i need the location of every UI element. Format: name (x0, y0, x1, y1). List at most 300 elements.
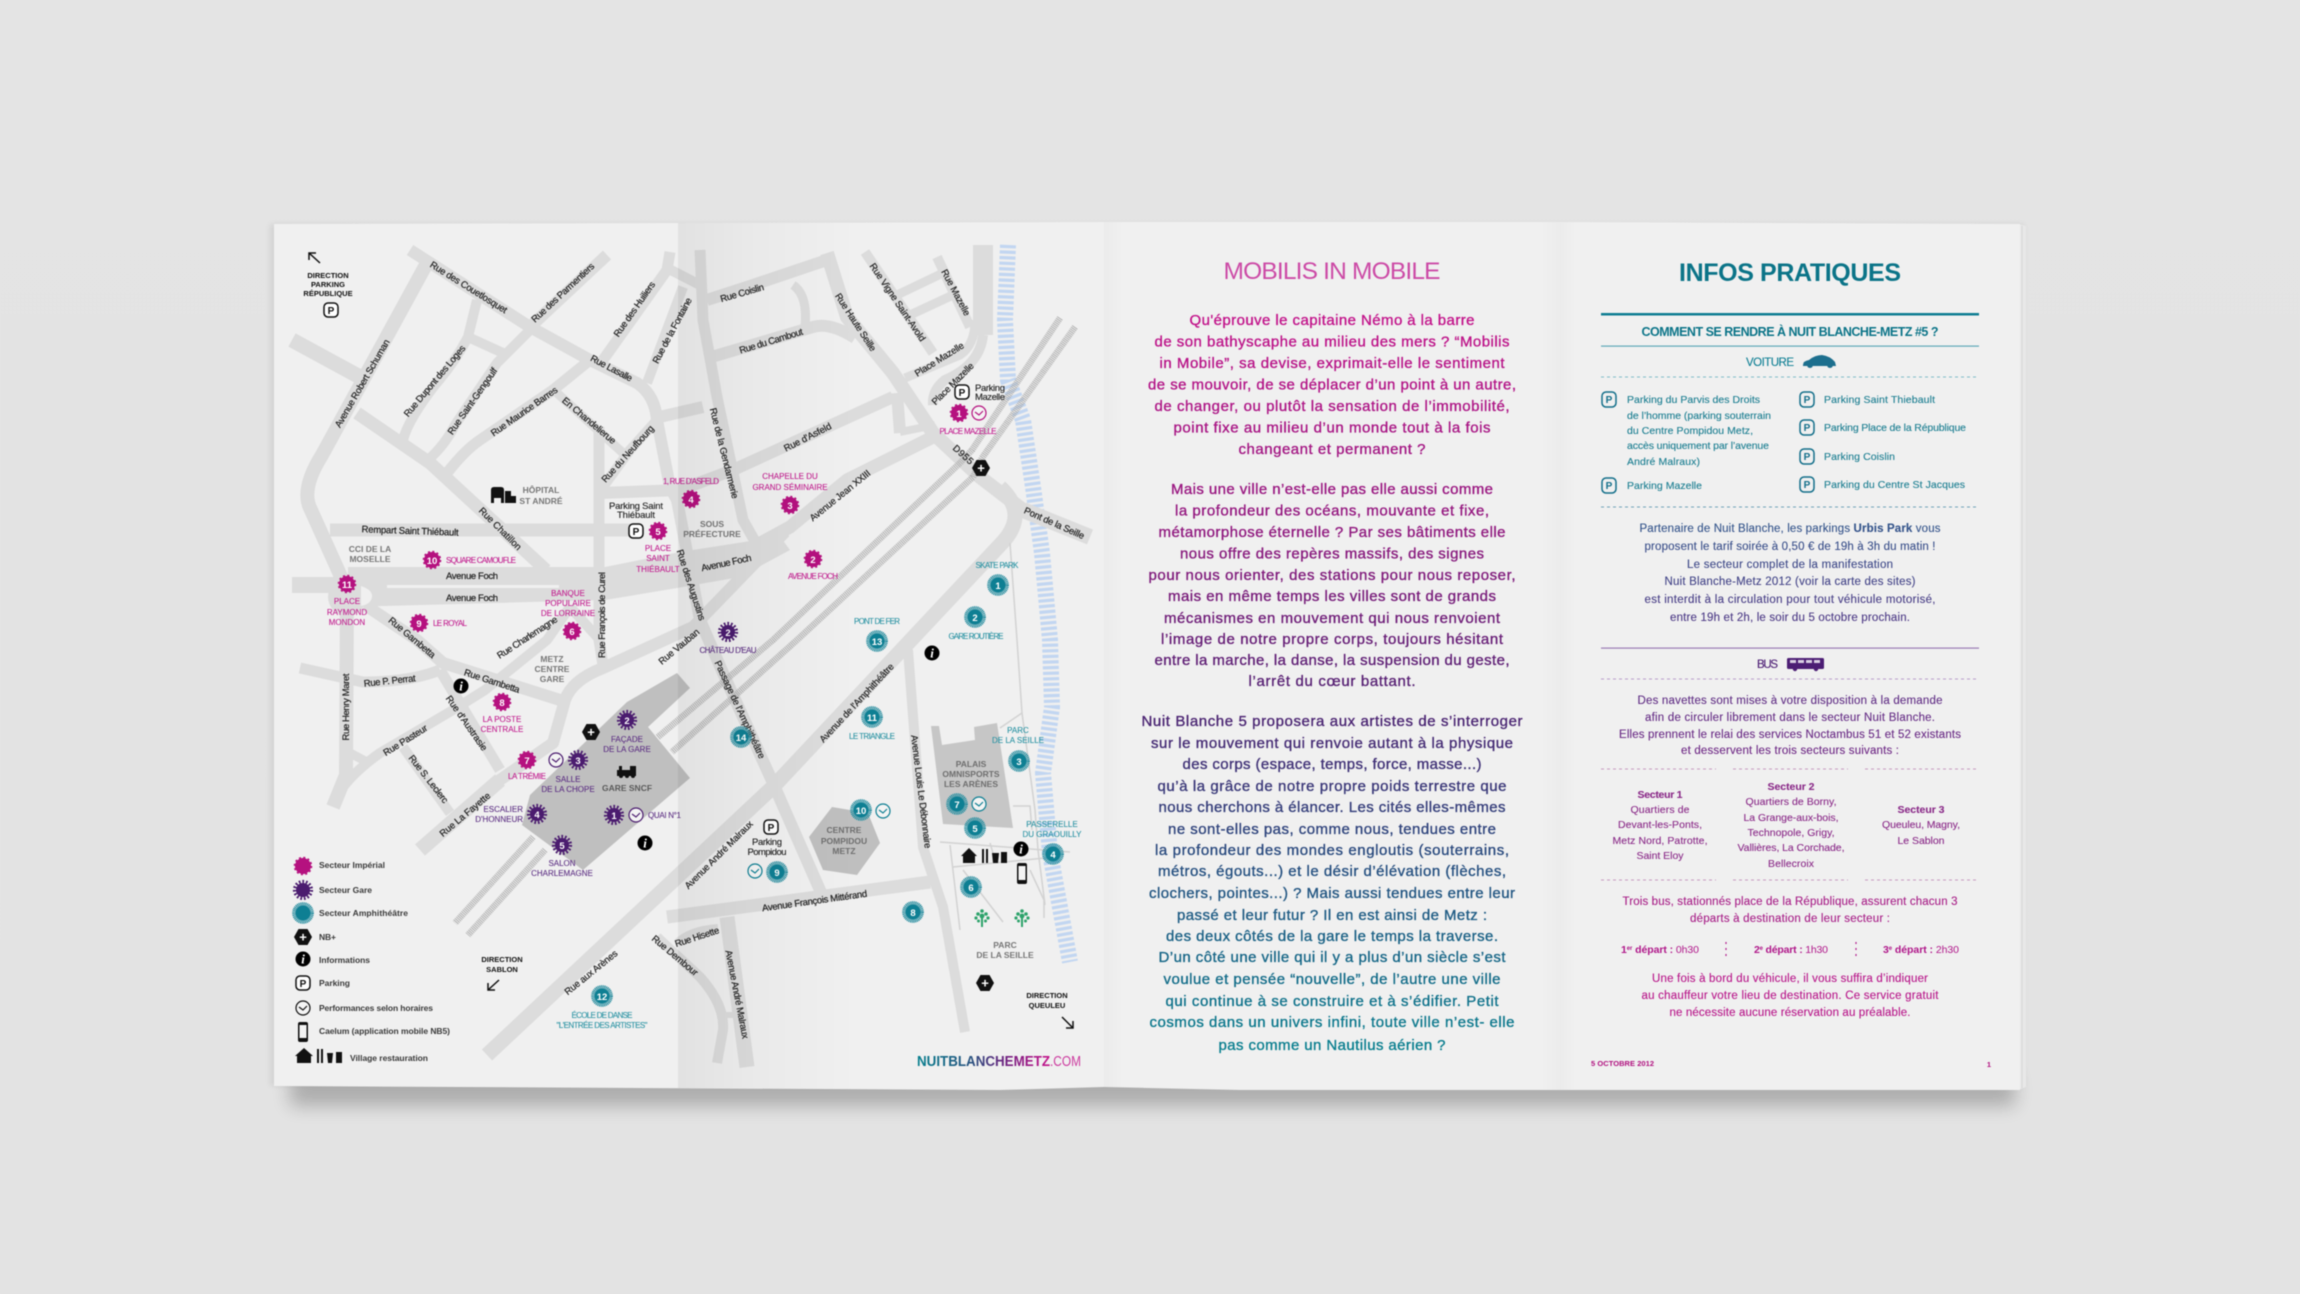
text: une fois à bord: ne nécessite aucune réservation au préalable. (1670, 1007, 1910, 1019)
street names: Rue Vauban (657, 627, 702, 667)
parking icon letters: P (1606, 395, 1613, 406)
sectors (1612, 781, 1960, 870)
departure times: 1 (1621, 944, 1627, 956)
body text: qui continue à se construire et à s’édifier. Petit (1166, 993, 1499, 1010)
direction labels (303, 271, 1068, 1010)
venue labels: secteur amphithéâtre: DE LA SEILLE (992, 736, 1044, 745)
body text: pas comme un Nautilus aérien ? (1218, 1037, 1446, 1054)
street names: Rue La Fayette (438, 791, 493, 840)
text: navettes (1619, 695, 1961, 757)
legend icons (292, 858, 342, 1063)
street names: Rue Maurice Barres (489, 385, 560, 439)
departure times: e (1760, 946, 1764, 952)
street names: Rue Gambetta (386, 615, 438, 661)
street names: Avenue François Mittérand (761, 889, 868, 914)
icons: parking: P (959, 388, 966, 399)
street names: Avenue Jean XXIII (808, 468, 873, 524)
parking icon letters: P (1606, 481, 1613, 492)
text: une fois à bord (1642, 973, 1939, 1019)
legend labels: Performances selon horaires (319, 1003, 433, 1013)
venue labels: secteur impérial: MONDON (329, 618, 365, 627)
street names: Rue de la Fontaine (651, 296, 695, 366)
label plate: Parking Saint Thiébault (605, 499, 667, 520)
page number: 1 (1987, 1060, 1991, 1069)
website address: .COM (1050, 1054, 1081, 1070)
body text: Mais une ville n’est-elle pas elle aussi comme (1171, 481, 1493, 498)
marker: secteur amphithéâtre numbered points: 4 (1050, 850, 1056, 861)
panel: map spread (274, 222, 1104, 1090)
icons: parking: P (328, 306, 335, 317)
departure times: 3 (1883, 944, 1889, 956)
body text: passé et leur futur ? Il en est ainsi de Metz : (1177, 907, 1487, 924)
street names: Rue Hisette (674, 925, 721, 950)
venue labels: secteur impérial: BANQUE (551, 589, 585, 598)
street names: Rue d'Austrasie (443, 694, 489, 753)
text: navettes: afin de circuler librement dans le secteur Nuit Blanche. (1645, 712, 1935, 724)
direction labels: DIRECTION (481, 955, 523, 964)
place names in grey: METZ (832, 846, 856, 856)
departure times: départ : (1763, 944, 1803, 956)
street names: Rue Lasalle (588, 353, 634, 384)
parking names: de l’homme (parking souterrain (1627, 410, 1771, 422)
marker: secteur amphithéâtre numbered points: 1 (995, 581, 1001, 592)
venue labels: secteur gare: FAÇADE (611, 735, 643, 744)
page paper (1104, 222, 1560, 1090)
icon: car (1803, 355, 1836, 368)
text: Urbis Park: est interdit à la circulation pour tout véhicule motorisé, (1644, 594, 1936, 606)
street names: Pont de la Seille (1022, 505, 1086, 542)
body text: changeant et permanent ? (1238, 441, 1426, 458)
place names in grey: DE LA SEILLE (976, 950, 1034, 960)
icon: phone Caelum (1017, 863, 1027, 884)
street names: Rue du Cambout (738, 327, 805, 357)
marker: secteur impérial numbered points: 3 (787, 501, 793, 512)
venue labels: secteur impérial: SAINT (646, 554, 670, 563)
venue labels: secteur amphithéâtre: DU GRAOUILLY (1023, 830, 1082, 839)
secteur 3: Queuleu, Magny, (1882, 819, 1960, 831)
marker: secteur amphithéâtre numbered points: 10 (856, 806, 866, 817)
street names: En Chandelierue (559, 395, 618, 447)
parking names: accès uniquement par l’avenue (1627, 440, 1769, 452)
icons: clocks (549, 406, 986, 878)
fold shading (678, 223, 858, 1088)
body text (1142, 312, 1522, 1054)
departure times: 1h30 (1805, 944, 1828, 956)
marker: secteur gare numbered points: 5 (559, 841, 565, 852)
secteur 2: Secteur 2 (1768, 781, 1815, 793)
parking names: Parking Coislin (1824, 451, 1895, 463)
icon: hospital (491, 487, 516, 503)
body text: l’image de notre propre corps, toujours hésitant (1161, 631, 1504, 648)
venue labels: secteur impérial: LA POSTE (483, 715, 521, 724)
rule (1601, 346, 1979, 347)
marker: secteur amphithéâtre numbered points: 5 (972, 824, 978, 835)
venue labels: secteur impérial: GRAND SÉMINAIRE (752, 483, 828, 492)
marker: secteur gare numbered points: 2 (624, 716, 630, 727)
parking icon letters (1606, 395, 1811, 492)
voiture heading: VOITURE (1746, 357, 1794, 369)
body text: cosmos dans un univers infini, toute ville n’est- elle (1150, 1014, 1514, 1031)
street names: Rue de la Gendarmerie (707, 407, 740, 500)
secteur 3: Secteur 3 (1898, 804, 1945, 816)
parking names: du Centre Pompidou Metz, (1627, 425, 1753, 437)
venue labels: secteur gare: CHARLEMAGNE (531, 869, 593, 878)
street names: Avenue André Malraux (683, 819, 756, 892)
legend labels: Informations (319, 955, 370, 965)
marker: secteur amphithéâtre numbered points: 13 (872, 637, 882, 648)
venue labels: secteur impérial: CENTRALE (481, 725, 523, 734)
place names in grey: POMPIDOU (821, 836, 867, 846)
street names: Avenue de l'Amphithéâtre (818, 662, 897, 745)
legend labels: Caelum (application mobile NB5) (319, 1026, 450, 1036)
text: trois bus (1622, 896, 1958, 925)
body text: clochers, pointes...) ? Mais aussi tendues entre leur (1149, 885, 1515, 902)
place names in grey: CENTRE (827, 825, 862, 835)
icons: NB+ (582, 460, 994, 991)
marker: secteur gare numbered points: 1 (611, 811, 617, 822)
venue labels: secteur gare: SALLE (556, 775, 580, 784)
footer date: 5 OCTOBRE 2012 (1591, 1059, 1654, 1068)
parking names: Parking du Parvis des Droits (1627, 394, 1760, 406)
place names in grey: HÔPITAL (523, 484, 559, 495)
secteur 3 (1882, 804, 1960, 847)
bus heading: BUS (1757, 659, 1778, 671)
direction labels: QUEULEU (1029, 1001, 1065, 1010)
parking names: Parking Mazelle (1627, 480, 1702, 492)
railway tracks (455, 318, 1075, 935)
venue labels: secteur impérial: AVENUE FOCH (788, 572, 838, 581)
icons: information: i (1019, 842, 1023, 856)
venue labels: secteur amphithéâtre: PONT DE FER (854, 617, 900, 626)
parking names: Parking (752, 837, 782, 848)
place names in grey: CENTRE (535, 664, 570, 674)
text: Urbis Park: entre 19h et 2h, le soir du 5 octobre prochain. (1670, 612, 1910, 624)
venue labels: secteur impérial: DE LORRAINE (541, 609, 595, 618)
rule (1601, 648, 1979, 649)
secteur 1: Metz Nord, Patrotte, (1612, 835, 1708, 847)
body text: de changer, ou plutôt la sensation de l’immobilité, (1154, 398, 1510, 415)
street names: Rue aux Arènes (563, 948, 620, 998)
street names: Rue du Neufbourg (600, 424, 657, 485)
marker: secteur impérial numbered points (339, 405, 967, 768)
venue labels: secteur amphithéâtre (556, 561, 1082, 1030)
direction labels: RÉPUBLIQUE (303, 289, 353, 298)
icons: information: i (459, 678, 463, 694)
venue labels: secteur amphithéâtre: PARC (1007, 726, 1029, 735)
marker: secteur amphithéâtre numbered points: 2 (972, 613, 978, 624)
dashed separator (1601, 678, 1979, 680)
venue labels: secteur amphithéâtre: LE TRIANGLE (849, 732, 895, 741)
venue labels: secteur gare: D'HONNEUR (475, 815, 523, 824)
street names: Rempart Saint Thiébault (361, 524, 459, 539)
icons: information: i (930, 646, 934, 660)
street names: Rue S. Leclerc (406, 753, 450, 806)
departure times: 2h30 (1936, 944, 1959, 956)
body text: qu’à la grâce de notre propre poids terrestre que (1158, 778, 1506, 795)
building: Palais Omnisports (931, 723, 1013, 828)
marker: secteur impérial numbered points: 5 (655, 527, 661, 538)
marker: secteur gare numbered points (529, 624, 736, 853)
spine shading (1540, 222, 1576, 1090)
body text: la profondeur des océans, mouvante et fixe, (1175, 502, 1489, 520)
departure times: 2 (1754, 944, 1760, 956)
venue labels: secteur impérial: PLACE (645, 544, 671, 553)
marker: secteur amphithéâtre numbered points: 12 (597, 992, 607, 1003)
secteur 1 (1612, 789, 1708, 862)
parking names: Thiébault (617, 510, 655, 521)
departure times: 0h30 (1676, 944, 1699, 956)
venue labels: secteur impérial: PLACE (334, 597, 360, 606)
venue labels: secteur impérial: SQUARE CAMOUFLE (446, 556, 516, 565)
dashed separator (1601, 376, 1979, 378)
parking names: Parking (975, 383, 1005, 394)
street names: Avenue Robert Schuman (333, 338, 393, 430)
icons: information (454, 646, 1028, 856)
parking names: André Malraux) (1627, 456, 1700, 468)
marker: secteur impérial numbered points: 11 (342, 580, 353, 591)
place names in grey: SOUS (700, 519, 724, 529)
place names in grey (349, 484, 1034, 960)
map paper (274, 222, 1104, 1090)
body text: D’un côté une ville qui il y a plus d’un siècle s’est (1158, 949, 1506, 966)
secteur 2: Quartiers de Borny, (1746, 796, 1836, 808)
text: Urbis Park: proposent le tarif soirée à 0,50 € de 19h à 3h du matin ! (1644, 541, 1936, 553)
legend labels: Village restauration (350, 1053, 428, 1063)
marker: secteur impérial numbered points: 7 (524, 756, 530, 767)
parking icon letters: P (1804, 423, 1811, 434)
venue labels: secteur amphithéâtre: SKATE PARK (976, 561, 1019, 570)
departure times: départ : (1632, 944, 1673, 956)
venue labels: secteur gare: QUAI N°1 (648, 811, 682, 820)
icon: village restauration (961, 848, 1007, 863)
place names in grey: GARE (540, 674, 565, 684)
body text: point fixe au milieu d’un monde tout à la fois (1174, 420, 1490, 436)
text: une fois à bord: Une fois à bord du véhicule, il vous suffira d’indiquer (1652, 973, 1928, 985)
body text: l’arrêt du cœur battant. (1248, 673, 1416, 690)
parking names: Pompidou (748, 847, 786, 858)
body text: des deux côtés de la gare le temps la traverse. (1166, 928, 1498, 945)
body text: métros, égouts...) et le désir d’élévation (flèches, (1158, 863, 1506, 880)
body text: pour nous orienter, des stations pour nous reposer, (1148, 567, 1516, 584)
departure times: er (1627, 946, 1633, 952)
street names: Rue Dembour (649, 934, 700, 979)
icons: NB+: + (981, 976, 989, 990)
legend labels: NB+ (319, 932, 336, 942)
legend labels: Secteur Gare (319, 885, 372, 895)
venue labels: secteur impérial: POPULAIRE (545, 599, 591, 608)
parking names: Parking Saint (609, 501, 663, 512)
body text: nous offre des repères massifs, des signes (1180, 546, 1484, 562)
body text: mais en même temps les villes sont de grands (1168, 588, 1496, 605)
arrow: direction Queuleu (1062, 1017, 1073, 1028)
street names: Rue des Augustins (674, 548, 707, 622)
marker: secteur amphithéâtre numbered points: 6 (968, 883, 974, 894)
website address: NUITBLANCHEMETZ (917, 1054, 1050, 1070)
legend labels: Secteur Impérial (319, 860, 385, 870)
legend labels: Parking (319, 978, 350, 988)
icons: parking: P (633, 527, 640, 538)
place names in grey: OMNISPORTS (942, 769, 1000, 779)
text: une fois à bord: au chauffeur votre lieu de destination. Ce service gratuit (1642, 990, 1939, 1002)
text: trois bus: départs à destination de leur secteur : (1690, 913, 1890, 925)
venue labels: secteur impérial: LA TRÉMIE (508, 772, 546, 781)
icon: trees (974, 909, 1030, 927)
text: Urbis Park (1640, 523, 1941, 624)
place names in grey: METZ (540, 654, 564, 664)
place names in grey: ST ANDRÉ (519, 496, 563, 506)
street names: D955 (950, 443, 975, 467)
marker: secteur impérial numbered points: 2 (810, 555, 816, 566)
venue labels: secteur impérial: PLACE MAZELLE (940, 427, 996, 436)
body text: sur le mouvement qui renvoie autant à la physique (1151, 735, 1513, 752)
secteur 1: Quartiers de (1630, 804, 1690, 816)
venue labels: secteur amphithéâtre: "L'ENTRÉE DES ARTISTES" (556, 1021, 648, 1030)
direction labels: SABLON (486, 965, 518, 974)
secteur 2: Technopole, Grigy, (1748, 827, 1834, 839)
street names: Place Mazelle (913, 340, 966, 379)
parking names (1627, 394, 1966, 492)
street names: Rue Haute Seille (832, 292, 878, 354)
venue labels: secteur amphithéâtre: ÉCOLE DE DANSE (572, 1011, 632, 1020)
page paper (1560, 222, 2020, 1090)
street names (333, 260, 1086, 1040)
street names: Avenue André Malraux (722, 949, 750, 1040)
text: Urbis Park: Nuit Blanche-Metz 2012 (voir la carte des sites) (1664, 576, 1916, 588)
marker: secteur gare numbered points: 4 (534, 810, 540, 821)
text: Urbis Park: Partenaire de Nuit Blanche, les parkings Urbis Park vous (1640, 523, 1941, 535)
secteur 1: Devant-les-Ponts, (1618, 819, 1702, 831)
parking icon letters: P (1804, 452, 1811, 463)
river Seille (1005, 245, 1070, 962)
heading: INFOS PRATIQUES (1679, 259, 1901, 287)
dashed separator (1601, 506, 1979, 508)
street names: Rue François de Curel (597, 572, 608, 658)
body text: Qu'éprouve le capitaine Némo à la barre (1190, 312, 1474, 329)
arrow: direction parking République (309, 253, 320, 263)
body text: Nuit Blanche 5 proposera aux artistes de s’interroger (1142, 713, 1522, 730)
street names: Avenue Louis Le Débonnaire (908, 734, 933, 849)
venue labels: secteur impérial (327, 427, 996, 781)
building: Centre Pompidou Metz (809, 807, 880, 875)
secteur 2 (1738, 781, 1844, 870)
street names: Rue P. Perrat (363, 673, 417, 690)
street names: Rue Chatillon (476, 506, 523, 553)
secteur 1: Secteur 1 (1638, 789, 1683, 801)
parking list (1602, 392, 1966, 493)
icons: NB+: + (587, 724, 595, 740)
street names: Passage de l'Amphithéâtre (712, 659, 767, 761)
body text: mécanismes en mouvement qui nous renvoient (1164, 610, 1501, 627)
street names: Rue d'Asfeld (782, 421, 834, 454)
street names: Rue Dupont des Loges (402, 343, 468, 419)
parking names: Mazelle (975, 392, 1005, 403)
place names in grey: GARE SNCF (602, 783, 652, 793)
panel: Mobilis in Mobile (1104, 222, 1560, 1090)
icons: NB+: + (977, 460, 985, 476)
road network (292, 245, 1090, 1067)
venue labels: secteur impérial: LE ROYAL (433, 619, 468, 628)
parking icon letters: P (1804, 480, 1811, 491)
place names in grey: CCI DE LA (349, 544, 391, 554)
body text: voulue et pensée “nouvelle”, de l’autre une ville (1164, 971, 1500, 988)
place names in grey: PALAIS (956, 759, 987, 769)
direction labels: DIRECTION (1026, 991, 1068, 1000)
street names: Rue Charlemagne (495, 614, 560, 662)
marker: secteur impérial numbered points: 6 (569, 627, 575, 638)
place names in grey: LES ARÈNES (944, 779, 998, 789)
icon: bus (1787, 658, 1824, 671)
venue labels: secteur impérial: CHAPELLE DU (762, 472, 818, 481)
marker: secteur gare numbered points: 3 (575, 756, 581, 767)
street names: Rue Vigne Saint-Avold (867, 261, 927, 344)
icons: parking: P (768, 823, 775, 834)
street names: Rue des Parmentiers (530, 261, 597, 325)
heading: MOBILIS IN MOBILE (1224, 258, 1440, 285)
body text: la profondeur des mondes engloutis (souterrains, (1155, 842, 1509, 859)
body text: nous cherchons à élancer. Les cités elles-mêmes (1158, 799, 1506, 816)
street names: Rue Gambetta (462, 667, 522, 696)
body text: des corps (espace, temps, force, masse...) (1182, 756, 1482, 773)
marker: secteur amphithéâtre numbered points: 9 (774, 868, 780, 879)
secteur 2: Vallières, La Corchade, (1738, 842, 1844, 854)
street names: Avenue Foch (446, 593, 498, 604)
departure times: e (1889, 946, 1893, 952)
venue labels: secteur impérial: THIÉBAULT (636, 565, 680, 574)
book shadow (270, 224, 2024, 1106)
marker: secteur impérial numbered points: 8 (499, 698, 505, 709)
marker: secteur impérial numbered points: 4 (688, 495, 694, 506)
text: Urbis Park: Le secteur complet de la manifestation (1687, 559, 1893, 571)
marker: secteur amphithéâtre numbered points: 14 (736, 733, 747, 744)
marker: secteur amphithéâtre numbered points: 3 (1016, 757, 1022, 768)
parking icons (1602, 392, 1814, 493)
street names: Rue des Huiliers (612, 280, 658, 339)
legend labels: Secteur Amphithéâtre (319, 908, 408, 918)
marker: secteur gare numbered points: 2 (725, 628, 731, 639)
marker: secteur impérial numbered points: 9 (416, 619, 422, 630)
marker: secteur amphithéâtre numbered points: 7 (954, 800, 960, 811)
text: trois bus: Trois bus, stationnés place de la République, assurent chacun 3 (1622, 896, 1958, 908)
building: Gare SNCF (522, 673, 690, 870)
body text: métamorphose éternelle ? Par ses bâtiments elle (1158, 524, 1506, 541)
direction labels: DIRECTION (307, 271, 349, 280)
street names: Rue Mazelle (938, 268, 972, 318)
legend icons: P (300, 979, 307, 990)
street names: Rue Pasteur (382, 723, 430, 759)
text: navettes: Des navettes sont mises à votre disposition à la demande (1638, 695, 1942, 707)
text: navettes: et desservent les trois secteurs suivants : (1681, 745, 1899, 757)
venue labels: secteur impérial: 1, RUE D'ASFELD (663, 477, 719, 486)
icons: information: i (643, 836, 647, 850)
venue labels: secteur gare: ESCALIER (483, 805, 523, 814)
venue labels: secteur gare: SALON (548, 859, 576, 868)
dashed separators: sectors (1601, 769, 1979, 880)
street names: Rue Henry Maret (341, 673, 352, 740)
page stack edge (2018, 224, 2026, 1090)
legend icons: + (299, 930, 307, 944)
body text: ne sont-elles pas, comme nous, tendues entre (1168, 821, 1496, 838)
icons: parking (324, 303, 969, 834)
body text: entre la marche, la danse, la suspension du geste, (1154, 652, 1510, 669)
secteur 3: Le Sablon (1898, 835, 1945, 847)
rule (1601, 313, 1979, 316)
departure times (1621, 942, 1959, 957)
marker: secteur amphithéâtre numbered points (591, 574, 1064, 1007)
park paths (940, 543, 1070, 930)
legend labels (319, 860, 450, 1063)
venue labels: secteur amphithéâtre: PASSERELLE (1026, 820, 1078, 829)
spine shadow (1104, 222, 1124, 1087)
